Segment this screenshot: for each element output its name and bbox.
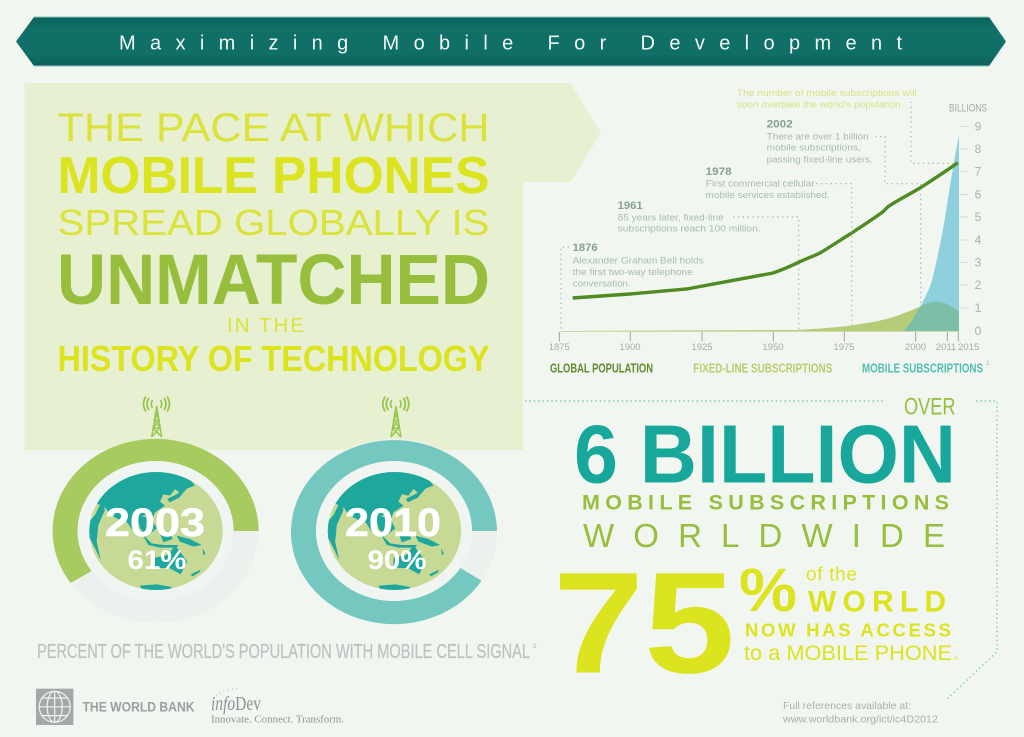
callout: overtake: The number of mobile subscriptions will — [737, 88, 917, 99]
y axis: 1 — [975, 301, 982, 315]
stat: 75 percent: WORLD — [808, 586, 946, 619]
callout: 1961: subscriptions reach 100 million. — [618, 224, 761, 235]
y axis: 8 — [975, 142, 982, 156]
donut chart: 2010 — [291, 439, 497, 624]
stat: 6 billion: OVER — [904, 394, 956, 421]
icon: signal tower 2010 — [383, 396, 409, 437]
callout: 1876 — [573, 242, 704, 289]
callout: 1876: Alexander Graham Bell holds — [573, 256, 704, 267]
stat: 75 percent: NOW HAS ACCESS — [745, 620, 951, 641]
stat: 75 percent: 75 — [553, 542, 735, 704]
stat: 75 percent: of the — [806, 565, 857, 586]
stat: 6 billion: 6 BILLION — [574, 408, 956, 501]
x axis: 1875 — [549, 342, 570, 353]
percent label 61%: 61% — [128, 545, 186, 575]
callout: 1876: the first two-way telephone — [573, 267, 693, 278]
donut caption: PERCENT OF THE WORLD'S POPULATION WITH MOBILE CELL SIGNAL — [37, 641, 530, 663]
dotted frame — [525, 401, 997, 699]
logo: the world bank — [36, 689, 195, 725]
y axis — [949, 102, 987, 338]
references note: Full references available at: — [783, 700, 911, 712]
percent label 90%: 90% — [368, 545, 426, 575]
donut caption: 2 — [533, 643, 537, 650]
callout: 2002 — [767, 119, 873, 165]
callout: 2002: 2002 — [767, 119, 793, 131]
logo: infodev: infoDev — [211, 693, 261, 715]
x axis: 1900 — [619, 342, 641, 353]
headline line: history of technology: HISTORY OF TECHNOLOGY — [58, 338, 490, 379]
legend — [550, 360, 990, 376]
area: fixed-line subscriptions — [560, 306, 959, 331]
callout: 2002: passing fixed-line users. — [767, 154, 873, 165]
callout: overtake — [737, 88, 917, 110]
callout: 1961: 1961 — [618, 200, 643, 212]
callout: 2002: mobile subscriptions, — [767, 143, 861, 154]
x axis: 2000 — [905, 342, 926, 353]
area: mobile subscriptions — [903, 135, 959, 331]
x axis: 1950 — [762, 342, 784, 353]
stat: 75 percent: % — [739, 556, 797, 624]
callout: 1876: 1876 — [573, 242, 598, 254]
references note — [782, 700, 938, 726]
x axis: 2015 — [958, 342, 979, 353]
headline line: mobile phones: MOBILE PHONES — [58, 147, 490, 205]
headline line: in the: IN THE — [227, 314, 304, 337]
legend: GLOBAL POPULATION — [550, 362, 653, 376]
callout: 2002: There are over 1 billion — [767, 131, 869, 142]
logo: infodev — [211, 689, 344, 726]
area: overlap — [903, 302, 959, 331]
headline line: unmatched: UNMATCHED — [57, 241, 490, 320]
stat: 6 billion — [574, 394, 956, 554]
callout: overtake: soon overtake the world's population — [737, 99, 901, 110]
x axis — [549, 332, 979, 353]
year label 2003: 2003 — [105, 501, 205, 545]
headline line: the pace at which: THE PACE AT WHICH — [58, 106, 490, 150]
logo: infodev: Innovate. Connect. Transform. — [211, 715, 344, 726]
callout: 1876: conversation. — [573, 278, 631, 289]
callout: 1978: mobile services established. — [706, 190, 830, 201]
y axis: 2 — [975, 278, 982, 292]
callout: 1961: 85 years later, fixed-line — [618, 212, 724, 223]
callout: 1978 — [706, 166, 830, 201]
callout: 1978: First commercial cellular — [706, 179, 816, 190]
stat: 75 percent — [553, 542, 958, 704]
stat: 6 billion: WORLDWIDE — [583, 517, 945, 554]
callout: 1978: 1978 — [706, 166, 732, 178]
line: global population — [573, 163, 958, 298]
legend: 1 — [986, 360, 990, 367]
y axis: BILLIONS — [949, 102, 987, 114]
y axis: 7 — [975, 164, 982, 178]
references note: www.worldbank.org/ict/ic4D2012 — [782, 714, 938, 726]
x axis: 2011 — [936, 342, 956, 353]
title banner — [16, 17, 1006, 66]
y axis: 0 — [975, 324, 982, 338]
callout leader lines — [561, 102, 958, 330]
icon: signal tower 2003 — [144, 396, 170, 437]
callout: 1961 — [618, 200, 761, 235]
y axis: 3 — [975, 256, 982, 270]
y axis: 4 — [975, 233, 982, 247]
legend: FIXED-LINE SUBSCRIPTIONS — [693, 362, 832, 376]
headline line: spread globally is: SPREAD GLOBALLY IS — [58, 202, 490, 243]
stat: 75 percent: 3 — [954, 655, 958, 662]
x axis: 1975 — [833, 342, 855, 353]
panel: headline — [24, 83, 601, 450]
title banner: Maximizing Mobile For Development — [119, 32, 902, 54]
logo: the world bank: THE WORLD BANK — [82, 700, 195, 715]
y axis: 5 — [975, 210, 982, 224]
y axis: 9 — [975, 120, 982, 134]
year label 2010: 2010 — [345, 501, 441, 545]
legend: MOBILE SUBSCRIPTIONS — [862, 362, 983, 376]
chart: subscriptions over time — [549, 88, 990, 376]
y axis: 6 — [975, 188, 982, 202]
stat: 6 billion: MOBILE SUBSCRIPTIONS — [582, 490, 949, 514]
stat: 75 percent: to a MOBILE PHONE — [744, 642, 952, 665]
donut chart: 2003 — [52, 438, 259, 590]
x axis: 1925 — [691, 342, 713, 353]
